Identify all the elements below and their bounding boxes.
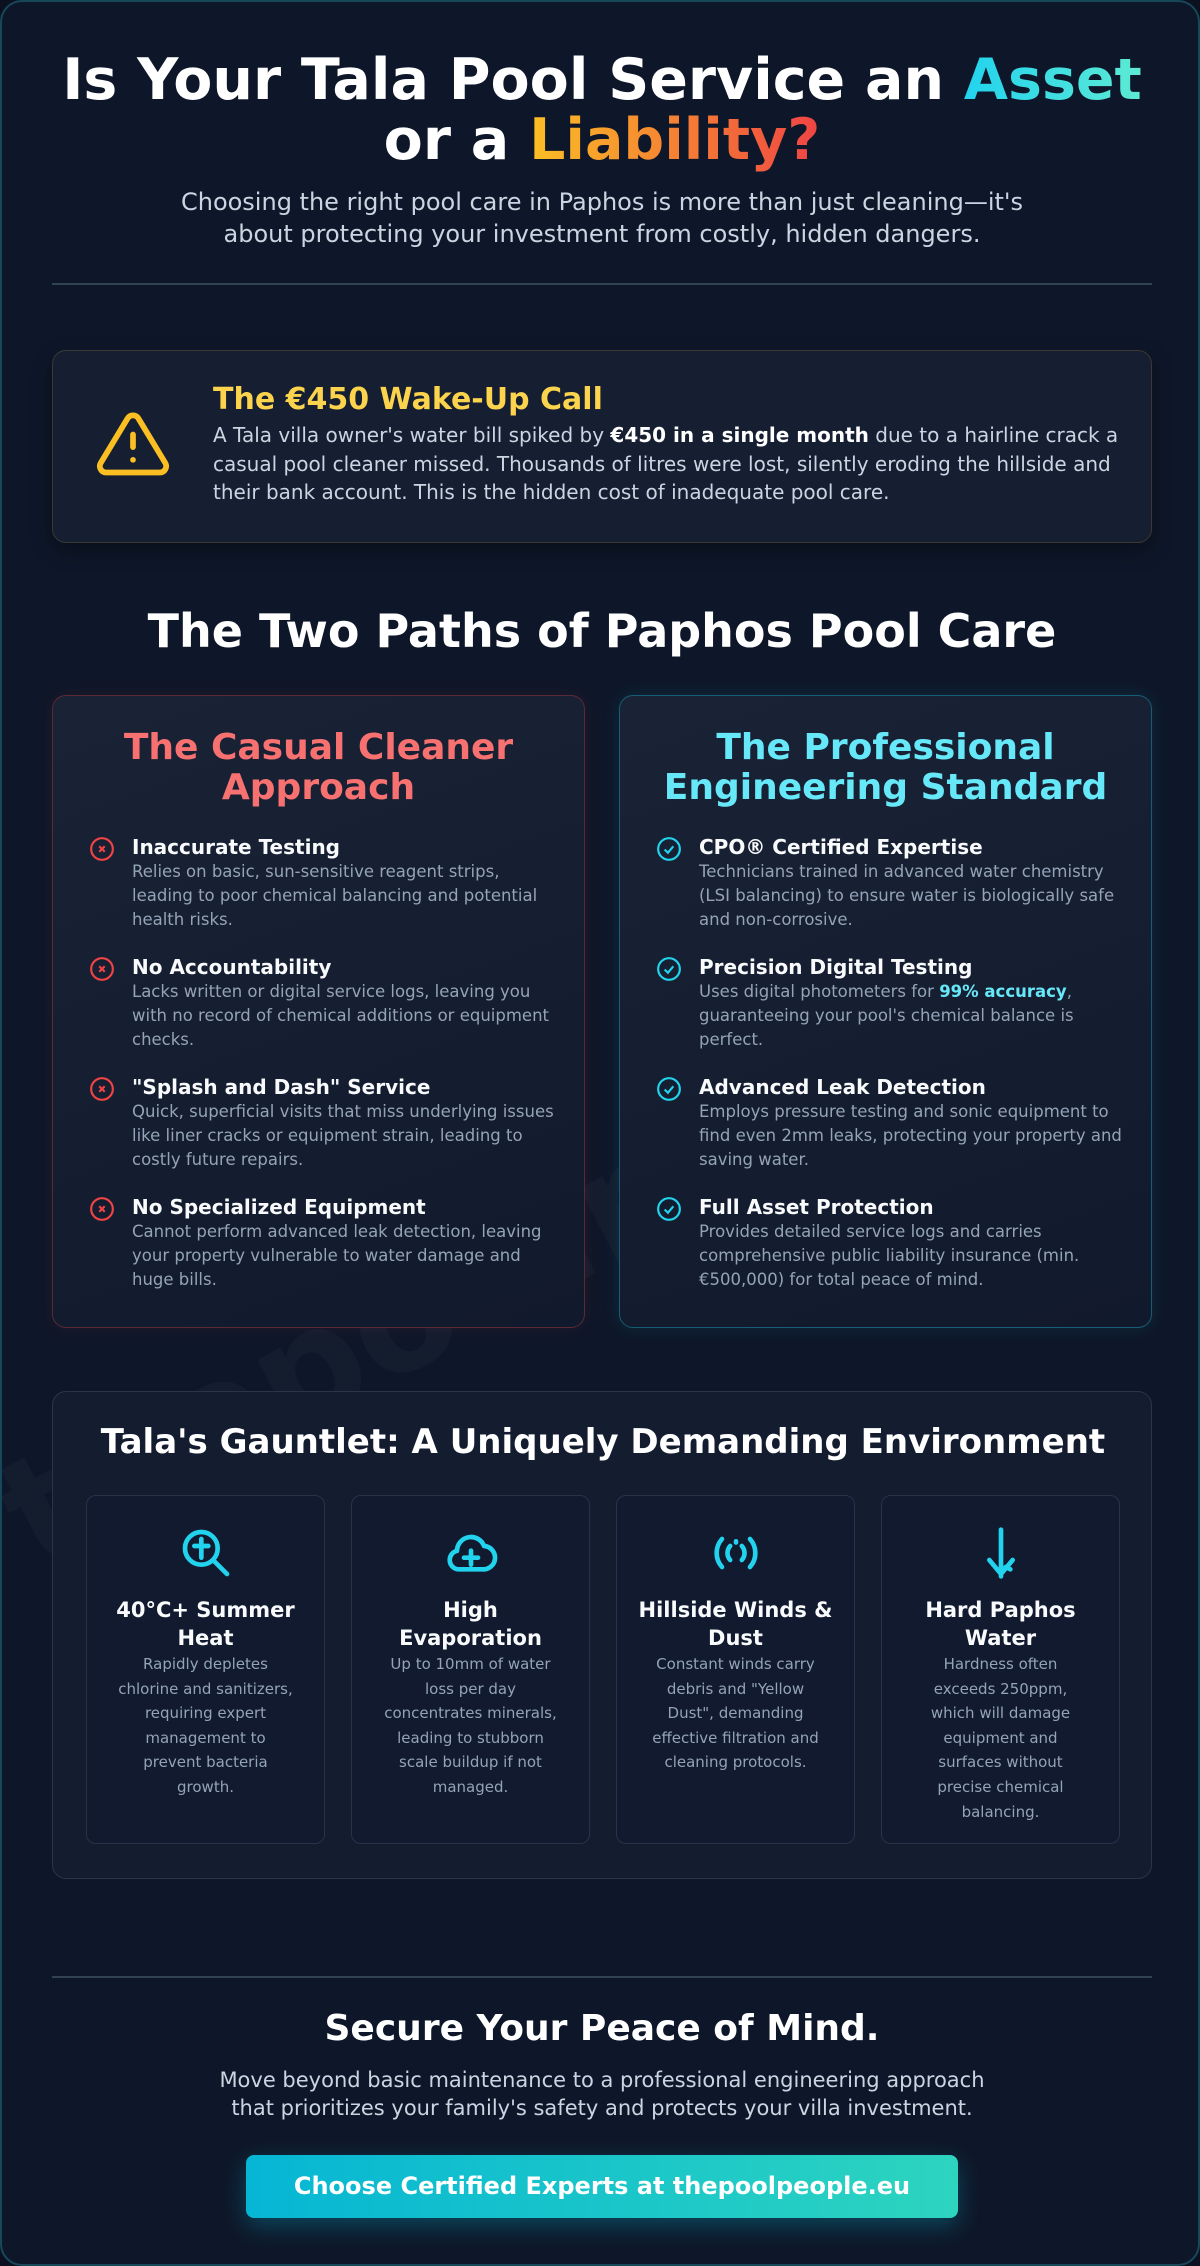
panel heading: Approach bbox=[222, 767, 415, 808]
card: summer heat: Rapidly depletes bbox=[143, 1655, 268, 1673]
item: splash and dash: like liner cracks or equipment strain, leading to bbox=[132, 1126, 523, 1145]
title: or a Liability? bbox=[384, 107, 820, 173]
gauntlet heading: Tala's Gauntlet: A Uniquely Demanding Environment bbox=[101, 1422, 1105, 1462]
card: evaporation: concentrates minerals, bbox=[384, 1704, 557, 1722]
heading: two paths: The Two Paths of Paphos Pool Care bbox=[148, 604, 1056, 658]
title bbox=[62, 47, 1142, 173]
card: summer heat bbox=[86, 1495, 325, 1844]
item: no accountability: No Accountability bbox=[132, 955, 331, 979]
icon: warning bbox=[96, 412, 170, 476]
card: hard water: Water bbox=[965, 1626, 1036, 1650]
heading: secure peace of mind: Secure Your Peace of Mind. bbox=[324, 2008, 879, 2049]
card: evaporation: High bbox=[443, 1598, 498, 1622]
item: inaccurate testing bbox=[90, 835, 537, 929]
card: hard water: surfaces without bbox=[938, 1753, 1063, 1771]
card: hard water bbox=[881, 1495, 1120, 1844]
panel heading: Engineering Standard bbox=[664, 767, 1107, 808]
item: splash and dash: Quick, superficial visits that miss underlying issues bbox=[132, 1102, 554, 1121]
item: no accountability: Lacks written or digital service logs, leaving you bbox=[132, 982, 530, 1001]
card: evaporation: loss per day bbox=[425, 1680, 516, 1698]
card: evaporation: Up to 10mm of water bbox=[390, 1655, 551, 1673]
card: hard water: precise chemical bbox=[937, 1778, 1064, 1796]
item: no accountability: checks. bbox=[132, 1030, 194, 1049]
card: summer heat: chlorine and sanitizers, bbox=[118, 1680, 293, 1698]
item: CPO: Technicians trained in advanced water chemistry bbox=[699, 862, 1104, 881]
button: CTA bbox=[246, 2155, 958, 2218]
item: no accountability: with no record of chemical additions or equipment bbox=[132, 1006, 549, 1025]
panel: Tala's gauntlet bbox=[52, 1391, 1152, 1879]
item: leak detection: Advanced Leak Detection bbox=[699, 1075, 986, 1099]
card: evaporation bbox=[351, 1495, 590, 1844]
item: asset protection: €500,000) for total peace of mind. bbox=[699, 1270, 984, 1289]
card: winds & dust: Constant winds carry bbox=[656, 1655, 815, 1673]
card: evaporation: scale buildup if not bbox=[399, 1753, 542, 1771]
item: inaccurate testing: health risks. bbox=[132, 910, 233, 929]
card: winds & dust: cleaning protocols. bbox=[664, 1753, 807, 1771]
card: hard water: balancing. bbox=[962, 1803, 1039, 1821]
card: summer heat: requiring expert bbox=[145, 1704, 266, 1722]
item: CPO: CPO® Certified Expertise bbox=[699, 835, 983, 859]
item: CPO: (LSI balancing) to ensure water is biologically safe bbox=[699, 886, 1114, 905]
watermark: thepoolpeople bbox=[0, 876, 1129, 1602]
callout text bbox=[213, 382, 1118, 504]
item: asset protection: comprehensive public liability insurance (min. bbox=[699, 1246, 1079, 1265]
item: no accountability bbox=[90, 955, 549, 1049]
card: winds & dust: effective filtration and bbox=[652, 1729, 819, 1747]
panel heading bbox=[124, 727, 514, 808]
button: CTA: Choose Certified Experts at thepoolpeople.eu bbox=[294, 2172, 910, 2200]
item: asset protection bbox=[657, 1195, 1079, 1289]
callout text: A Tala villa owner's water bill spiked by €450 in a single month due to a hairline crack a casual pool cleaner missed. Thousands of litres were lost, silently eroding the hillside and their bank account. This is the hidden cost of inadequate pool care. bbox=[213, 423, 1118, 504]
item: splash and dash: "Splash and Dash" Service bbox=[132, 1075, 430, 1099]
item: asset protection: Full Asset Protection bbox=[699, 1195, 934, 1219]
item: digital testing: guaranteeing your pool's chemical balance is bbox=[699, 1006, 1074, 1025]
item: leak detection bbox=[657, 1075, 1122, 1169]
item: inaccurate testing: Inaccurate Testing bbox=[132, 835, 340, 859]
item: no specialized equipment bbox=[90, 1195, 542, 1289]
panel heading bbox=[664, 727, 1107, 808]
item: leak detection: Employs pressure testing and sonic equipment to bbox=[699, 1102, 1109, 1121]
item: CPO bbox=[657, 835, 1114, 929]
item: leak detection: saving water. bbox=[699, 1150, 809, 1169]
subtitle: Choosing the right pool care in Paphos is more than just cleaning—it's about protecting your investment from costly, hidden dangers. bbox=[181, 188, 1023, 248]
item: inaccurate testing: leading to poor chemical balancing and potential bbox=[132, 886, 537, 905]
item: leak detection: find even 2mm leaks, protecting your property and bbox=[699, 1126, 1122, 1145]
card: hard water: which will damage bbox=[931, 1704, 1070, 1722]
item: splash and dash: costly future repairs. bbox=[132, 1150, 303, 1169]
card: hard water: Hard Paphos bbox=[925, 1598, 1076, 1622]
card: summer heat: management to bbox=[145, 1729, 266, 1747]
callout: €450 wake-up call bbox=[52, 350, 1152, 543]
card: winds & dust bbox=[616, 1495, 855, 1844]
card: winds & dust: Hillside Winds & bbox=[639, 1598, 832, 1622]
panel heading: The Casual Cleaner bbox=[124, 727, 513, 768]
card: hard water: exceeds 250ppm, bbox=[934, 1680, 1067, 1698]
item: no specialized equipment: No Specialized Equipment bbox=[132, 1195, 426, 1219]
panel heading: The Professional bbox=[716, 727, 1055, 768]
card: summer heat: prevent bacteria bbox=[143, 1753, 268, 1771]
card: winds & dust: Dust bbox=[708, 1626, 763, 1650]
card: evaporation: Evaporation bbox=[399, 1626, 542, 1650]
item: digital testing bbox=[657, 955, 1074, 1049]
item: inaccurate testing: Relies on basic, sun-sensitive reagent strips, bbox=[132, 862, 499, 881]
item: no specialized equipment: huge bills. bbox=[132, 1270, 217, 1289]
card: summer heat: Heat bbox=[177, 1626, 234, 1650]
item: asset protection: Provides detailed service logs and carries bbox=[699, 1222, 1042, 1241]
card: hard water: Hardness often bbox=[944, 1655, 1057, 1673]
callout text: The €450 Wake-Up Call bbox=[213, 382, 603, 417]
item: no specialized equipment: your property vulnerable to water damage and bbox=[132, 1246, 521, 1265]
item: digital testing: perfect. bbox=[699, 1030, 763, 1049]
card: evaporation: leading to stubborn bbox=[397, 1729, 544, 1747]
item: CPO: and non-corrosive. bbox=[699, 910, 853, 929]
card: winds & dust: Dust", demanding bbox=[668, 1704, 803, 1722]
item: digital testing: Uses digital photometers for 99% accuracy, bbox=[699, 982, 1072, 1001]
card: hard water: equipment and bbox=[943, 1729, 1058, 1747]
card: summer heat: 40°C+ Summer bbox=[116, 1598, 295, 1622]
card: summer heat: growth. bbox=[177, 1778, 234, 1796]
title: Is Your Tala Pool Service an Asset bbox=[62, 47, 1142, 113]
panel: casual cleaner bbox=[52, 695, 585, 1328]
item: splash and dash bbox=[90, 1075, 554, 1169]
item: digital testing: Precision Digital Testing bbox=[699, 955, 972, 979]
item: no specialized equipment: Cannot perform advanced leak detection, leaving bbox=[132, 1222, 542, 1241]
card: winds & dust: debris and "Yellow bbox=[667, 1680, 804, 1698]
closing text: Move beyond basic maintenance to a professional engineering approach that prioritizes your family's safety and protects your villa investment. bbox=[219, 2068, 985, 2120]
panel: professional standard bbox=[619, 695, 1152, 1328]
card: evaporation: managed. bbox=[433, 1778, 508, 1796]
